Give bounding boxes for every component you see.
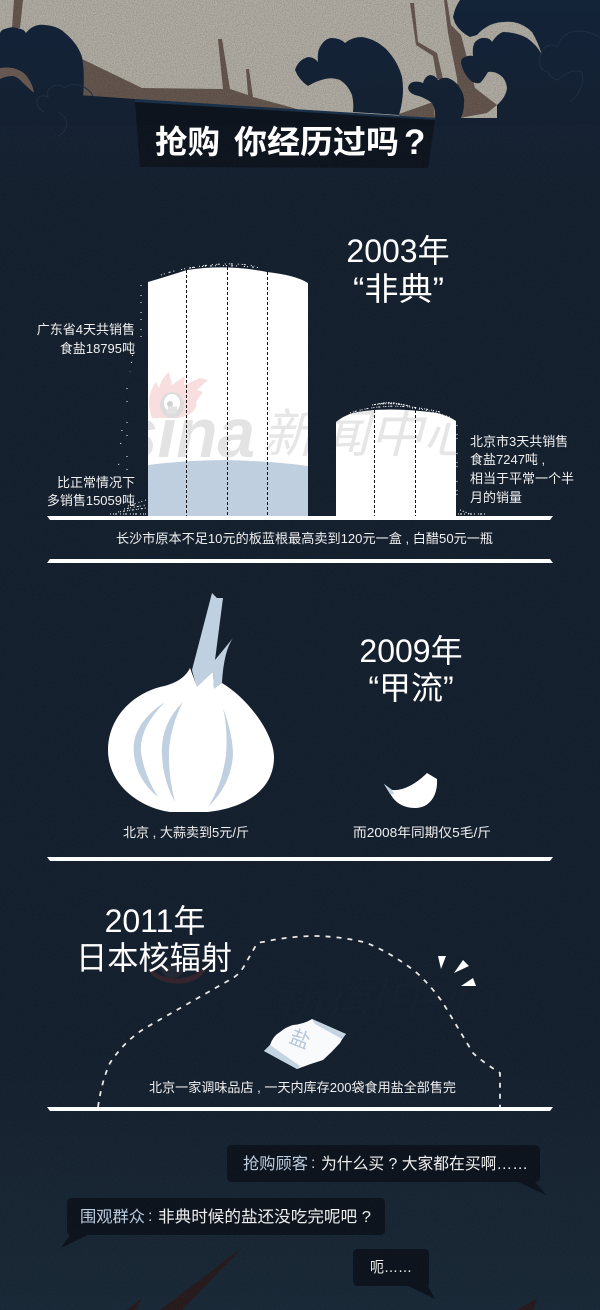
- title text: ?: [404, 123, 425, 162]
- label: Beijing total: 食盐7247吨 ,: [470, 452, 545, 467]
- rule below note: [47, 559, 553, 563]
- heading: 2009 H1N1: [359, 633, 463, 706]
- icon: salt bag: 盐: [286, 1025, 313, 1054]
- title text: 你经历过吗: [234, 124, 399, 160]
- watermark: sina news: 新闻中心: [262, 406, 478, 464]
- heading: 2011 Japan nuclear radiation: [76, 903, 232, 976]
- caption: garlic price 2008: 而2008年同期仅5毛/斤: [353, 825, 491, 840]
- rule: [47, 1107, 553, 1111]
- heading: 2003 SARS: “非典”: [353, 271, 444, 307]
- heading: 2009 H1N1: 2009年: [359, 633, 463, 669]
- watermark: sina news: [148, 372, 456, 458]
- title text: [155, 123, 425, 162]
- faint cloud outlines: [37, 31, 600, 136]
- heading: 2003 SARS: [346, 233, 450, 307]
- chart: Beijing salt sales bar: [336, 410, 456, 516]
- speech bubble: onlooker: :: [148, 1208, 152, 1225]
- note: isatis and vinegar prices: 长沙市原本不足10元的板蓝根最高卖到120元一盒 , 白醋50元一瓶: [116, 531, 493, 546]
- rule: [47, 857, 553, 861]
- speech bubble: onlooker: [61, 1198, 385, 1248]
- crack marks at bottom: [127, 1247, 537, 1310]
- label: Beijing total: [470, 434, 574, 505]
- label: Guangdong total: 食盐18795吨: [60, 341, 135, 356]
- label: extra sales: 多销售15059吨: [47, 493, 135, 508]
- caption: salt sold out: 北京一家调味品店 , 一天内库存200袋食用盐全部售完: [149, 1080, 456, 1095]
- speech bubble: onlooker: 围观群众: [80, 1208, 145, 1226]
- label: extra sales: [47, 475, 135, 508]
- label: Guangdong total: 广东省4天共销售: [37, 322, 135, 337]
- speech bubble: er: [353, 1249, 435, 1299]
- speech bubble: panic buyer: [227, 1145, 546, 1195]
- bar segment: extra sales: [148, 460, 308, 516]
- salt particles: [110, 264, 486, 514]
- speech bubble: panic buyer: 为什么买 ? 大家都在买啊……: [321, 1155, 528, 1173]
- heading: 2011 Japan nuclear radiation: 日本核辐射: [76, 940, 232, 976]
- header scene: sky, ruins and waves: [0, 0, 600, 140]
- faint watermark: [148, 966, 496, 1026]
- label: Beijing total: 相当于平常一个半: [470, 471, 574, 486]
- speech bubble: er: 呃……: [370, 1259, 412, 1276]
- label: Guangdong total: [37, 322, 135, 356]
- dashed outline: salt pile: [98, 936, 500, 1107]
- heading: 2011 Japan nuclear radiation: 2011年: [105, 903, 205, 939]
- faint watermark: 新闻中心: [270, 973, 496, 1026]
- chart: Guangdong salt sales bar: [148, 267, 308, 516]
- label: extra sales: 比正常情况下: [57, 475, 135, 490]
- label: Beijing total: 北京市3天共销售: [470, 434, 568, 449]
- speech bubble: panic buyer: 抢购顾客: [243, 1155, 308, 1173]
- title text: 抢购: [155, 124, 220, 160]
- bar dashes: [186, 267, 416, 516]
- icon: salt bag: [264, 1019, 346, 1069]
- icon: garlic clove: [384, 773, 437, 808]
- title banner: [135, 99, 435, 168]
- heading: 2003 SARS: 2003年: [346, 233, 450, 269]
- icon: emphasis ticks: [438, 956, 476, 986]
- rule above note: [47, 516, 553, 520]
- icon: large garlic bulb: [108, 593, 274, 812]
- speech bubble: onlooker: 非典时候的盐还没吃完呢吧 ?: [158, 1208, 371, 1226]
- speech bubble: panic buyer: :: [311, 1155, 315, 1172]
- watermark: sina news: sina: [120, 394, 255, 472]
- caption: garlic price Beijing: 北京 , 大蒜卖到5元/斤: [123, 825, 249, 840]
- label: Beijing total: 月的销量: [470, 490, 522, 505]
- heading: 2009 H1N1: “甲流”: [368, 670, 454, 706]
